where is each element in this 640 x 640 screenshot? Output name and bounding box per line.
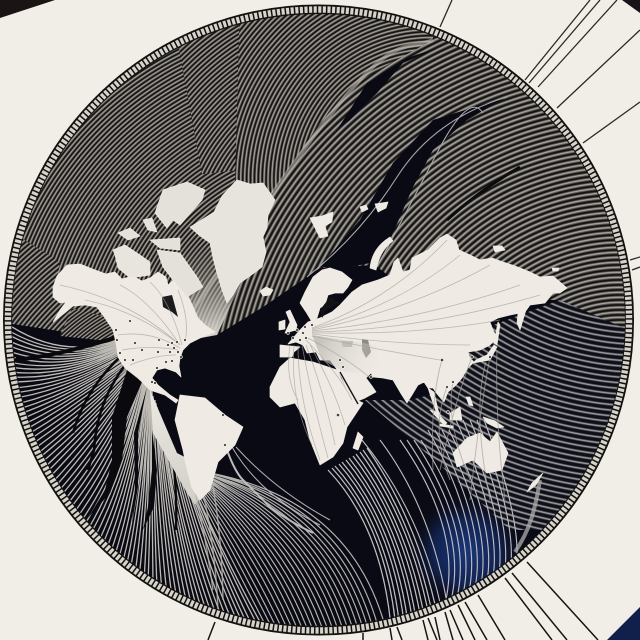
flow lines across wedge — [307, 97, 507, 277]
corner: top left dark — [0, 0, 55, 18]
Iberia — [280, 345, 300, 357]
dense grey mesh south of Alaska — [60, 308, 118, 342]
Malay peninsula — [428, 388, 441, 416]
blue glow — [416, 502, 516, 598]
Franz Josef Land — [360, 202, 388, 212]
Java — [440, 424, 453, 428]
black wedge: north Atlantic — [320, 97, 507, 268]
grey band from New Zealand to the rim — [515, 480, 540, 552]
Novaya Zemlya — [370, 237, 393, 270]
bottom bundle: single lines from Madagascar — [362, 440, 446, 602]
Great Britain — [285, 310, 297, 333]
flow lines over land: East Asia to the south — [432, 350, 505, 500]
bottom bundle: from Asia — [400, 420, 517, 620]
Borneo — [450, 407, 462, 420]
South America — [175, 395, 243, 500]
flow field: upper left — [23, 48, 202, 280]
flow field: top — [235, 14, 433, 194]
Iceland — [260, 287, 273, 296]
flow lines over land: North America — [60, 282, 186, 365]
flow field: upper right — [217, 36, 625, 335]
Davis strait light flow — [184, 248, 240, 338]
radial tick lines outside the disc — [208, 0, 640, 640]
flow lines: fan from North America to the lower left — [6, 323, 264, 629]
grey shading over west Asia — [312, 335, 385, 375]
flow field: Baffin Bay — [185, 170, 236, 336]
Canadian Arctic: Victoria — [113, 245, 150, 278]
bright band west of South America — [150, 390, 199, 504]
flow field: lower right — [365, 300, 640, 530]
Canadian Arctic: small islands — [118, 218, 180, 250]
Australia — [453, 432, 508, 473]
flow lines over land: Europe to Asia — [306, 240, 540, 400]
corner: bottom right navy — [607, 607, 640, 640]
North America — [53, 264, 215, 403]
pale lines continuing to the bottom edge — [194, 481, 224, 610]
Kamchatka — [517, 303, 528, 330]
Caspian — [362, 339, 371, 358]
city markers — [115, 320, 491, 446]
Sakhalin — [494, 322, 500, 345]
Arctic Siberia islands — [493, 246, 559, 271]
flow lines: below South America to the bottom edge — [200, 474, 384, 626]
Red Sea — [340, 372, 358, 404]
flow field: upper left transition — [178, 24, 240, 174]
Madagascar — [353, 432, 363, 450]
lines off eastern South America — [232, 447, 330, 525]
New Guinea — [483, 417, 504, 428]
Greenland — [190, 180, 275, 303]
bright arc off South America — [227, 450, 313, 533]
Eurasia — [288, 234, 567, 403]
Canadian Arctic: Ellesmere — [155, 182, 205, 228]
Sumatra — [430, 410, 447, 425]
black wedge: upper streak — [337, 48, 437, 130]
Svalbard — [310, 212, 333, 238]
Black Sea — [341, 341, 353, 347]
Canadian Arctic: Baffin — [157, 250, 203, 297]
inland seas — [320, 297, 371, 404]
bottom bundle: from Africa — [328, 448, 436, 618]
Hudson Bay — [162, 295, 178, 317]
pale streak toward the top edge — [193, 38, 434, 310]
corner: top right dark — [622, 0, 640, 13]
Japan — [473, 345, 497, 363]
black bands in the lower left fan — [17, 337, 176, 530]
New Zealand — [527, 473, 543, 492]
black streak: siberian side — [447, 167, 520, 220]
flow lines over land: Africa — [289, 345, 345, 460]
Africa — [270, 358, 363, 465]
Ireland — [279, 320, 285, 330]
land masses — [53, 180, 567, 500]
Scandinavia — [300, 268, 352, 322]
flow field: west of Alaska — [12, 239, 103, 332]
Baltic — [320, 297, 340, 318]
Philippines — [466, 397, 473, 406]
